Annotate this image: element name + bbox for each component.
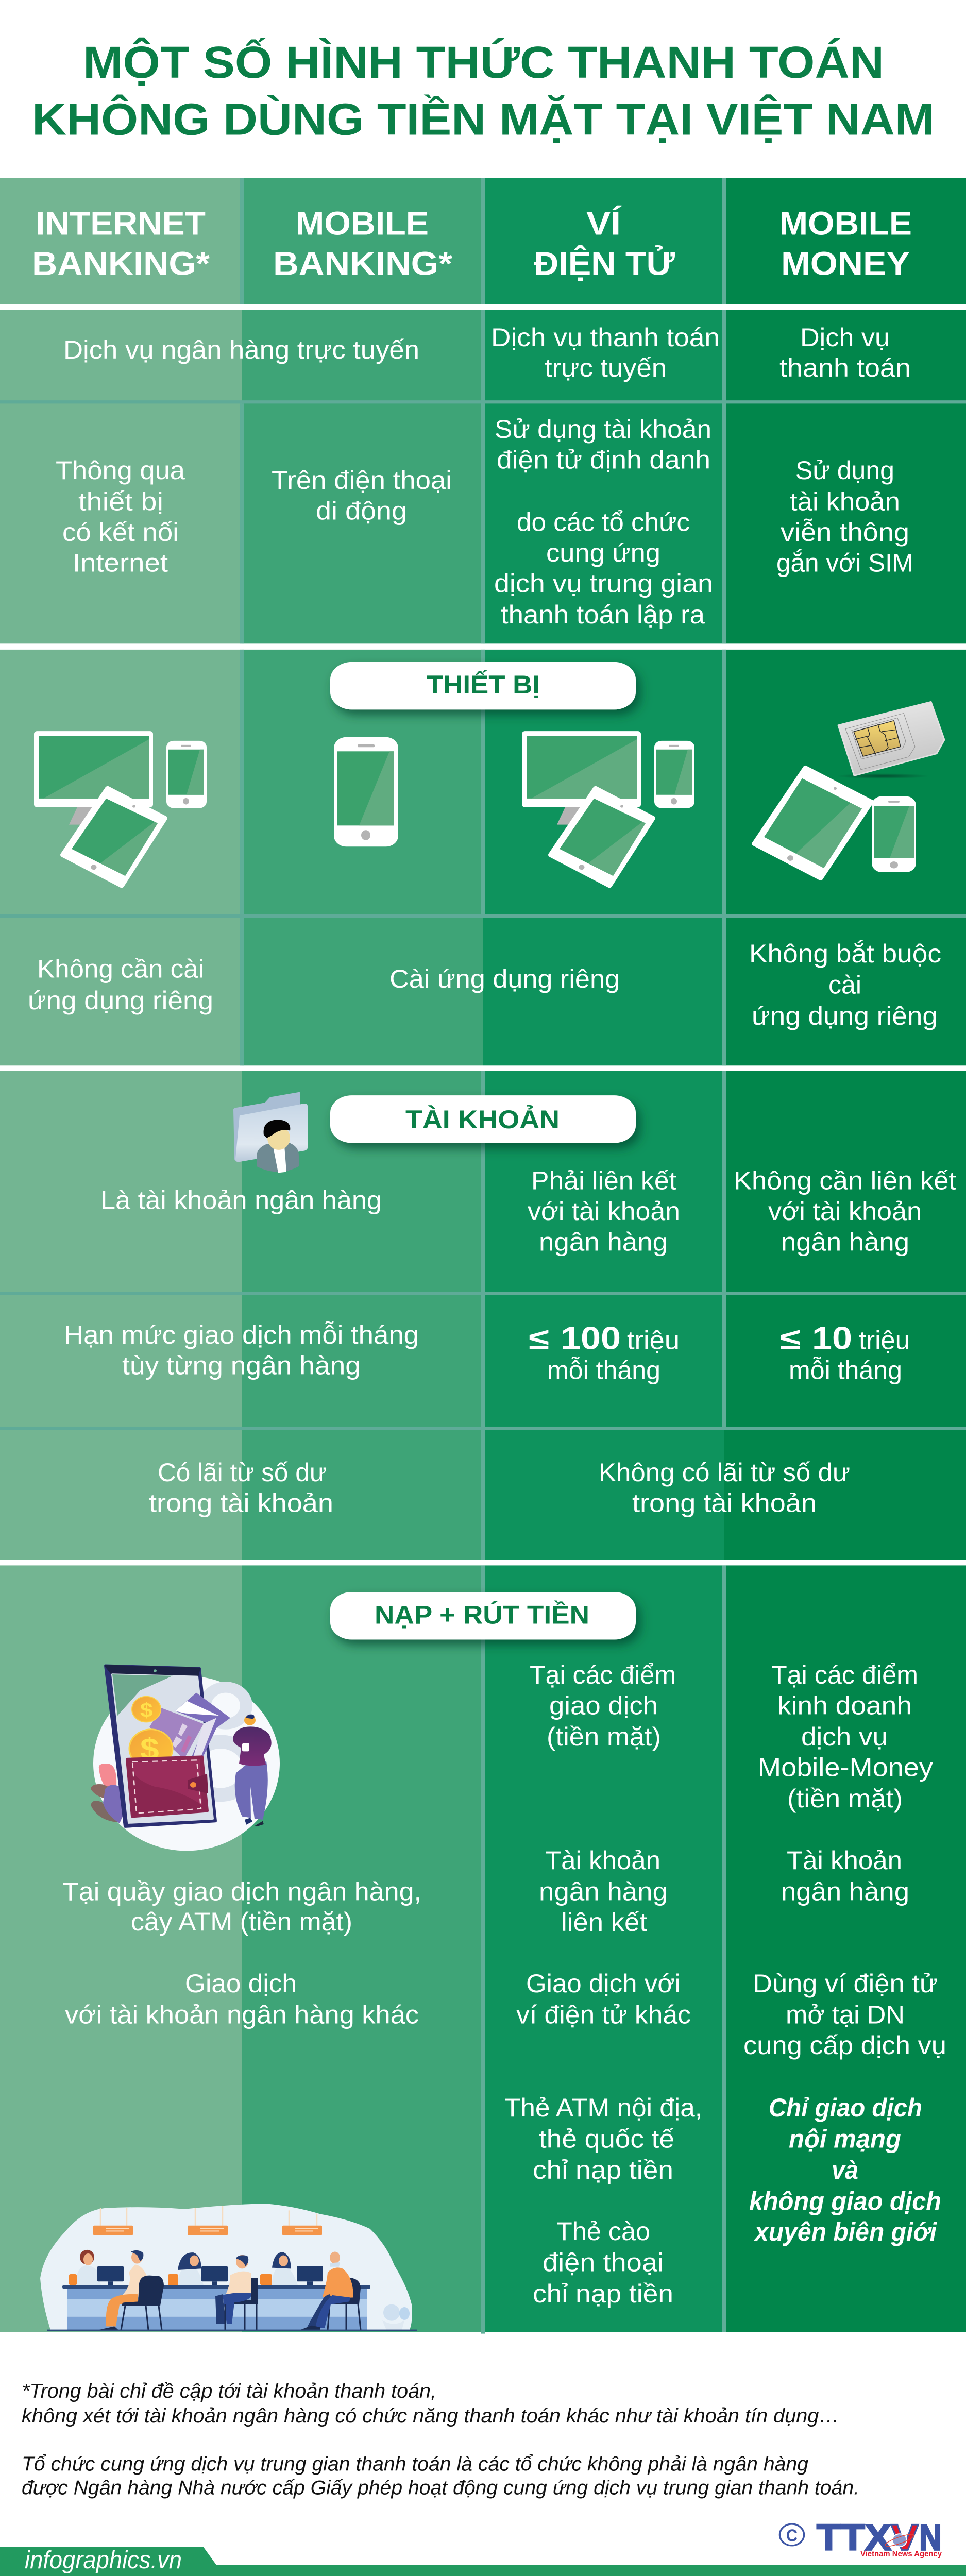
text: e-wallet top-up methods: điện thoại [543, 2249, 664, 2277]
panel: footnotes [22, 2379, 859, 2499]
text: on mobile phone [272, 466, 452, 526]
text: e-wallet top-up methods: chỉ nạp tiền [533, 2280, 673, 2308]
text: mobile money top-up methods: Mobile-Money [758, 1753, 934, 1782]
text: e-wallet account: cung ứng [546, 539, 660, 567]
text: e-wallet top-up methods: Giao dịch với [526, 1970, 681, 1998]
text: mobile money top-up methods: Tại các điểm [771, 1661, 918, 1689]
text: mobile money top-up methods: dịch vụ [801, 1723, 888, 1751]
text: no interest on balance: Không có lãi từ số dư [599, 1459, 850, 1487]
text: mobile money top-up methods: mở tại DN [786, 2001, 905, 2029]
icon: monitor, phone and tablet (column 1) [34, 731, 207, 886]
text: monthly limit by bank [64, 1321, 419, 1380]
footer: site name: infographics.vn [25, 2546, 182, 2573]
text: e-wallet account: dịch vụ trung gian [494, 570, 713, 598]
title [32, 37, 935, 144]
text: e-wallet top-up methods: giao dịch [549, 1691, 658, 1720]
title: MỘT SỐ HÌNH THỨC THANH TOÁN [83, 37, 884, 88]
panel: accounts [0, 1071, 966, 1560]
logo: TTXVN: N [919, 2517, 942, 2558]
callout: domestic network only: và [832, 2156, 858, 2184]
callout: domestic network only: nội mạng [789, 2125, 901, 2154]
text: mobile money top-up methods: Dùng ví điện tử [753, 1970, 938, 1998]
text: monthly limit by bank: Hạn mức giao dịch mỗi tháng [64, 1321, 419, 1349]
text: app not required: cài [828, 971, 861, 999]
text: telecom account with SIM: Sử dụng [795, 456, 894, 485]
stat: 100 million per month: 100 [561, 1320, 621, 1357]
icon: SIM card [836, 702, 944, 779]
text: no need to link bank account: ngân hàng [781, 1228, 909, 1257]
heading: Internet Banking [32, 205, 210, 282]
text: must link to bank account [528, 1166, 680, 1257]
text: app not required: ứng dụng riêng [752, 1002, 938, 1030]
logo: TTXVN: Vietnam News Agency [860, 2549, 942, 2558]
heading pill: Thiết bị [330, 662, 636, 709]
text: no interest on balance [599, 1459, 850, 1518]
text: at bank counter or ATM: Tại quầy giao dịch ngân hàng, [62, 1877, 421, 1906]
text: e-wallet top-up methods: (tiền mặt) [547, 1723, 661, 1751]
heading pill: Thiết bị: THIẾT BỊ [427, 670, 540, 700]
text: at bank counter or ATM: cây ATM (tiền mặt) [131, 1908, 352, 1936]
text: transactions with other bank accounts: Giao dịch [185, 1970, 297, 1998]
text: interest on balance [149, 1459, 333, 1518]
text: e-wallet account: do các tổ chức [517, 508, 690, 537]
text: transactions with other bank accounts: với tài khoản ngân hàng khác [65, 2001, 419, 2029]
heading: Mobile Money: MONEY [781, 245, 910, 282]
text: app not required: Không bắt buộc [749, 940, 941, 968]
text: online payment service [491, 324, 720, 382]
text: e-wallet account [494, 415, 713, 629]
panel: footnotes: Tổ chức cung ứng dịch vụ trung gian thanh toán là các tổ chức không phải là ngân hàng [22, 2452, 808, 2475]
text: interest on balance: trong tài khoản [149, 1489, 333, 1518]
text: on mobile phone: di động [316, 497, 407, 526]
heading: Mobile Banking: BANKING* [273, 245, 452, 282]
icon: smartphone (column 2) [334, 737, 398, 846]
text: e-wallet top-up methods: Thẻ cào [556, 2217, 650, 2246]
text: is a bank account: Là tài khoản ngân hàng [100, 1186, 382, 1215]
text: e-wallet top-up methods: chỉ nạp tiền [533, 2156, 673, 2184]
callout: domestic network only [749, 2094, 941, 2246]
text: telecom account with SIM: tài khoản [790, 487, 900, 516]
text: no separate app: ứng dụng riêng [28, 987, 213, 1015]
text: telecom account with SIM: viễn thông [781, 518, 909, 547]
stat: 10 million per month: ≤ [780, 1322, 801, 1356]
heading: Internet Banking: BANKING* [32, 245, 210, 282]
logo: TTXVN [780, 2517, 942, 2558]
text: no interest on balance: trong tài khoản [632, 1489, 817, 1518]
heading pill: Tài khoản [330, 1095, 636, 1143]
text: online payment service: Dịch vụ thanh toán [491, 324, 720, 352]
icon: tablet and phone (column 4) [754, 767, 916, 878]
logo: TTXVN: V [891, 2517, 919, 2558]
text: e-wallet top-up methods: liên kết [561, 1908, 647, 1937]
text: via internet device: Internet [73, 549, 168, 578]
text: payment service: Dịch vụ [800, 324, 890, 352]
text: via internet device: có kết nối [62, 518, 179, 547]
text: e-wallet account: thanh toán lập ra [501, 601, 705, 629]
text: e-wallet top-up methods: ngân hàng [539, 1877, 668, 1906]
stat: 100 million per month: mỗi tháng [547, 1356, 660, 1385]
text: e-wallet top-up methods: Tại các điểm [530, 1661, 676, 1689]
text: e-wallet top-up methods: thẻ quốc tế [539, 2125, 674, 2154]
text: no need to link bank account: với tài khoản [768, 1197, 922, 1226]
text: mobile money top-up methods: kinh doanh [777, 1691, 912, 1720]
heading: Mobile Money: MOBILE [779, 205, 912, 242]
text: e-wallet top-up methods [504, 1661, 702, 2308]
title: KHÔNG DÙNG TIỀN MẶT TẠI VIỆT NAM [32, 94, 935, 144]
heading: Ví điện tử [534, 205, 675, 282]
text: app not required [749, 940, 941, 1030]
stat: 10 million per month: 10 [812, 1320, 852, 1357]
text: no separate app: Không cần cài [37, 955, 204, 984]
stat: 100 million per month [529, 1320, 680, 1385]
text: via internet device: Thông qua [56, 456, 185, 485]
text: payment service: thanh toán [779, 354, 911, 382]
panel: definition rows [0, 310, 966, 643]
stat: 100 million per month: ≤ [529, 1322, 549, 1356]
text: transactions with other bank accounts [65, 1970, 419, 2029]
icon: monitor, phone and tablet (column 3) [522, 731, 694, 886]
callout: domestic network only: xuyên biên giới [753, 2218, 937, 2246]
text: e-wallet account: Sử dụng tài khoản [495, 415, 711, 444]
panel: top up and withdraw [0, 1565, 966, 2334]
heading: Ví điện tử: VÍ [586, 205, 622, 242]
text: e-wallet top-up methods: Thẻ ATM nội địa, [504, 2094, 702, 2122]
stat: 10 million per month: mỗi tháng [789, 1356, 902, 1385]
text: install separate app: Cài ứng dụng riêng [389, 965, 620, 993]
heading: Ví điện tử: ĐIỆN TỬ [534, 245, 675, 282]
text: e-wallet top-up methods: ví điện tử khác [516, 2001, 691, 2029]
panel: footnotes: được Ngân hàng Nhà nước cấp Giấy phép hoạt động cung ứng dịch vụ trung gian thanh toán. [22, 2476, 859, 2499]
illustration: phone wallet and man [91, 1666, 280, 1851]
text: e-wallet account: điện tử định danh [497, 446, 710, 474]
text: monthly limit by bank: tùy từng ngân hàng [122, 1351, 361, 1380]
heading pill: Nạp + rút tiền [330, 1592, 636, 1639]
panel: devices [0, 650, 966, 1065]
callout: domestic network only: không giao dịch [749, 2187, 941, 2216]
text: no need to link bank account: Không cần liên kết [734, 1166, 956, 1195]
text: no need to link bank account [734, 1166, 956, 1257]
text: telecom account with SIM: gắn với SIM [776, 549, 913, 578]
panel: column headers [0, 178, 966, 304]
text: online payment service: trực tuyến [545, 354, 667, 382]
text: online banking service: Dịch vụ ngân hàng trực tuyến [63, 336, 419, 365]
text: at bank counter or ATM [62, 1877, 421, 1936]
text: telecom account with SIM [776, 456, 913, 578]
text: on mobile phone: Trên điện thoại [272, 466, 452, 495]
icon: folder with person [233, 1092, 308, 1173]
callout: domestic network only: Chỉ giao dịch [769, 2094, 922, 2122]
text: must link to bank account: với tài khoản [528, 1197, 680, 1226]
text: mobile money top-up methods: (tiền mặt) [787, 1785, 903, 1813]
text: via internet device [56, 456, 185, 578]
stat: 10 million per month: triệu [859, 1327, 910, 1355]
text: mobile money top-up methods: cung cấp dịch vụ [743, 2031, 946, 2060]
illustration: phone wallet and man: $ [140, 1732, 159, 1766]
panel: footnotes: không xét tới tài khoản ngân hàng có chức năng thanh toán khác như tài khoản tín dụng… [22, 2404, 839, 2427]
text: must link to bank account: ngân hàng [539, 1228, 668, 1257]
text: mobile money top-up methods: Tài khoản [787, 1846, 902, 1875]
text: e-wallet top-up methods: Tài khoản [545, 1846, 660, 1875]
text: mobile money top-up methods: ngân hàng [781, 1877, 909, 1906]
text: must link to bank account: Phải liên kết [531, 1166, 676, 1195]
heading: Internet Banking: INTERNET [36, 205, 206, 242]
text: payment service [779, 324, 911, 382]
heading: Mobile Banking [273, 205, 452, 282]
logo: TTXVN: C [786, 2525, 798, 2545]
text: interest on balance: Có lãi từ số dư [158, 1459, 327, 1487]
illustration: bank counter [40, 2204, 417, 2331]
heading: Mobile Banking: MOBILE [296, 205, 429, 242]
text: via internet device: thiết bị [78, 487, 163, 516]
heading pill: Tài khoản: TÀI KHOẢN [405, 1105, 560, 1134]
panel: footnotes: *Trong bài chỉ đề cập tới tài khoản thanh toán, [22, 2379, 436, 2402]
text: mobile money top-up methods [743, 1661, 946, 2060]
logo: TTXVN: TTX [817, 2517, 891, 2558]
heading: Mobile Money [779, 205, 912, 282]
text: no separate app [28, 955, 213, 1015]
footer bar [0, 2546, 966, 2576]
stat: 10 million per month [780, 1320, 910, 1385]
illustration: phone wallet and man: $ [140, 1699, 152, 1721]
heading pill: Nạp + rút tiền: NẠP + RÚT TIỀN [375, 1600, 589, 1630]
stat: 100 million per month: triệu [627, 1327, 680, 1355]
